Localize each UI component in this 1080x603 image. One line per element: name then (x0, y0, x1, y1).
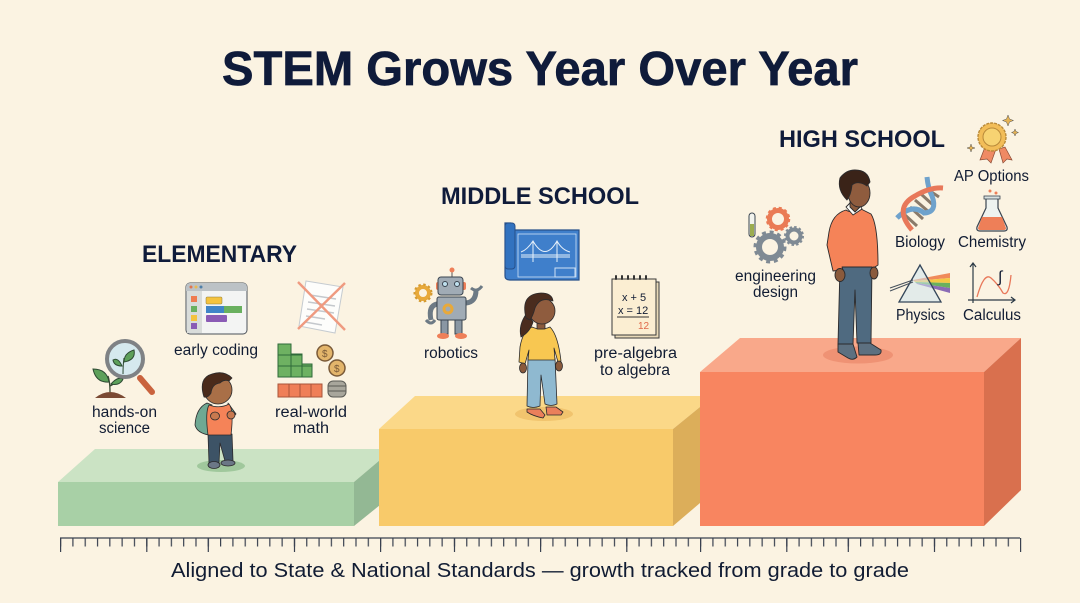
title: STEM Grows Year Over Year (222, 43, 858, 96)
icon: engineering gears (749, 208, 803, 262)
icon: chemistry flask (977, 190, 1007, 231)
icon: calculus graph (968, 263, 1015, 303)
label: hands-on science: science (99, 420, 150, 437)
footer caption: Aligned to State & National Standards — growth tracked from grade to grade (171, 560, 909, 582)
icon: coding window (186, 283, 247, 334)
icon: robot (414, 268, 482, 339)
icon: algebra notebook (612, 276, 659, 338)
icon: magnifier and plant (93, 341, 152, 398)
heading: elementary: ELEMENTARY (142, 241, 297, 268)
label: Calculus: Calculus (963, 307, 1021, 324)
ruler (60, 538, 1021, 552)
label: real-world math: real-world (275, 404, 347, 421)
label: pre-algebra to algebra: to algebra (600, 362, 670, 379)
figure: middle school student (515, 293, 573, 421)
icon: algebra notebook: 12 (638, 321, 650, 332)
icon: algebra notebook: x + 5 (622, 292, 646, 304)
panel: high school step (700, 338, 1021, 526)
panel: middle school step (379, 396, 700, 526)
heading: high school: HIGH SCHOOL (779, 126, 945, 153)
label: Chemistry: Chemistry (958, 234, 1026, 251)
panel: elementary step (58, 449, 380, 526)
icon: blocks and coins (278, 344, 346, 397)
icon: award medal (967, 115, 1018, 163)
label: AP Options: AP Options (954, 168, 1029, 185)
label: hands-on science: hands-on (92, 404, 157, 421)
figure: high school student (823, 170, 893, 364)
label: Biology: Biology (895, 234, 945, 251)
icon: calculus graph: ∫ (997, 269, 1004, 286)
heading: middle school: MIDDLE SCHOOL (441, 183, 639, 210)
label: robotics: robotics (424, 345, 478, 362)
icon: prism (890, 265, 950, 302)
label: engineering design: engineering (735, 268, 816, 285)
icon: blocks and coins: $ (334, 364, 340, 375)
label: pre-algebra to algebra: pre-algebra (594, 345, 677, 362)
icon: crossed-out worksheet (298, 281, 345, 333)
label: early coding: early coding (174, 342, 258, 359)
icon: DNA helix (897, 177, 943, 230)
icon: algebra notebook: x = 12 (618, 305, 648, 317)
label: Physics: Physics (896, 307, 945, 324)
label: real-world math: math (293, 420, 329, 437)
icon: blocks and coins: $ (322, 349, 328, 360)
label: engineering design: design (753, 284, 798, 301)
icon: bridge blueprint (505, 223, 579, 280)
figure: elementary student (195, 373, 245, 472)
